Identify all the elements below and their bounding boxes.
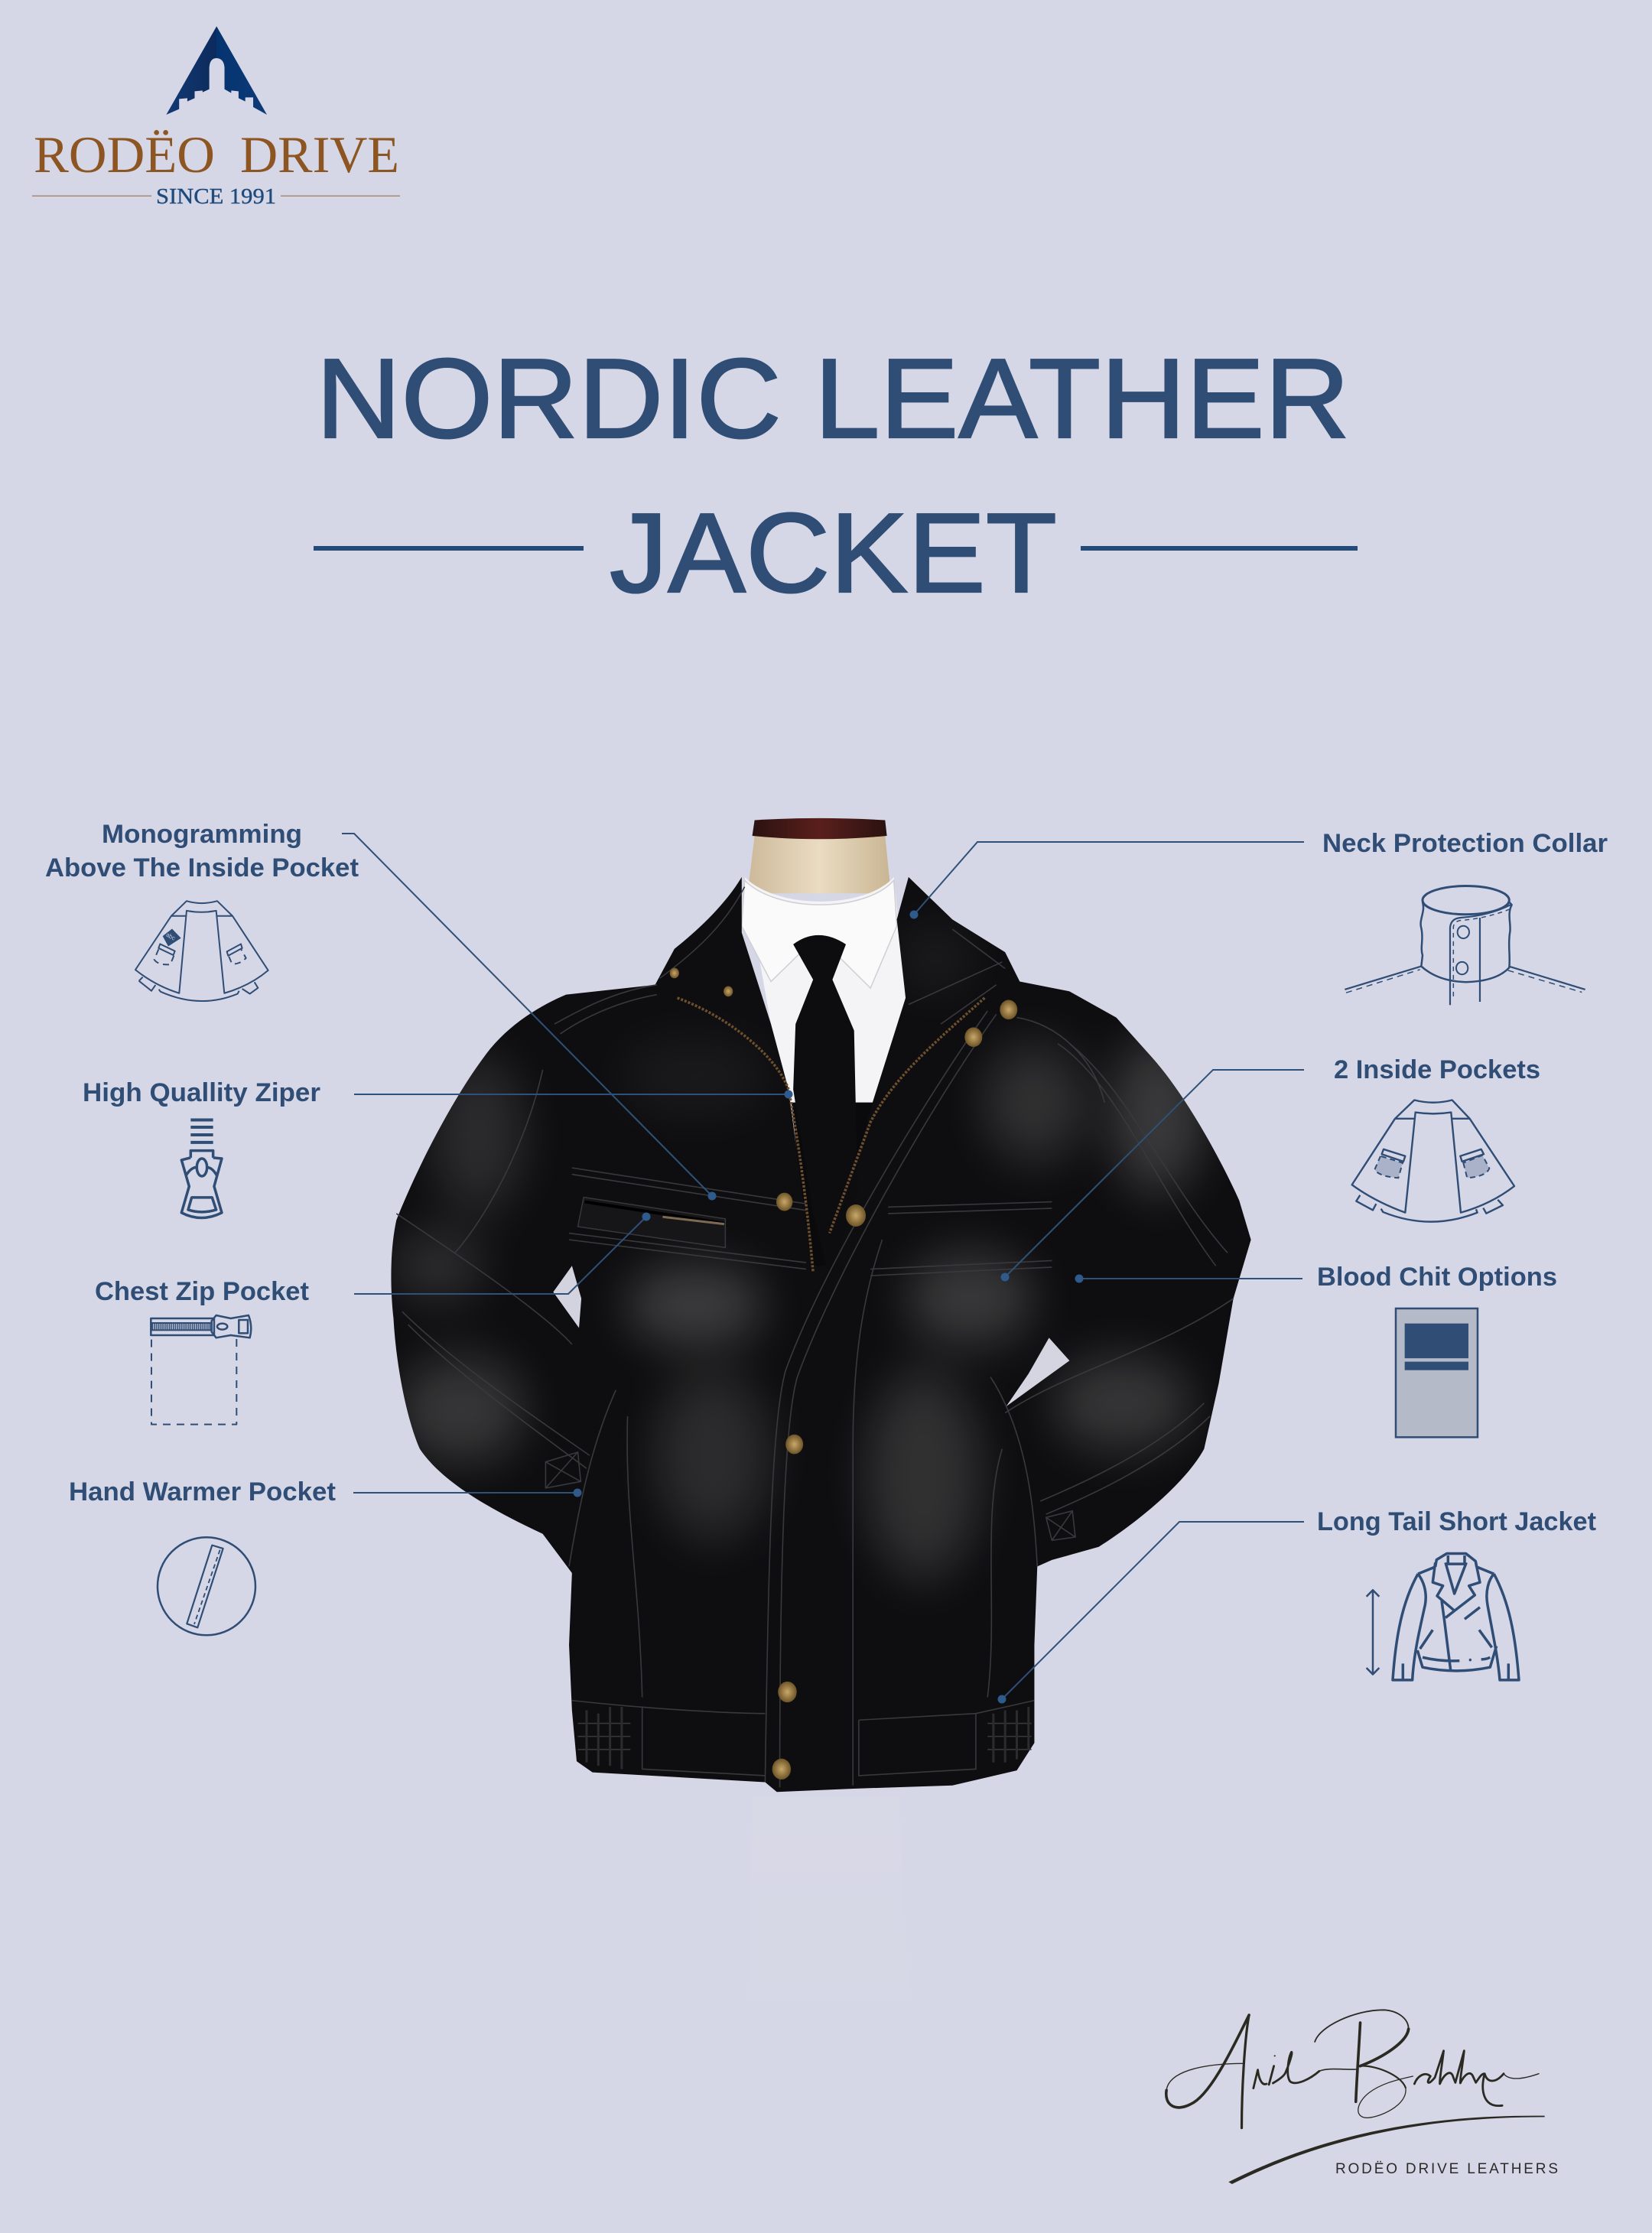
brand name xyxy=(34,125,399,184)
chest pocket zipper xyxy=(578,1198,725,1247)
label: blood chit options: Blood Chit Options xyxy=(1317,1263,1557,1292)
leader: long tail xyxy=(997,1522,1304,1704)
tie xyxy=(793,935,857,1279)
right gap xyxy=(1006,1338,1069,1406)
icon: collar xyxy=(1345,886,1585,1005)
icon: short jacket with length arrow xyxy=(1367,1553,1519,1680)
seams and stitching xyxy=(396,887,1234,1787)
jacket body xyxy=(391,877,1251,1792)
label: monogramming xyxy=(45,820,359,882)
icon: jacket interior with monogram: abc xyxy=(165,931,176,942)
icon: zipper pull xyxy=(181,1120,222,1217)
label: 2 inside pockets: 2 Inside Pockets xyxy=(1334,1055,1540,1084)
waistband ribbing xyxy=(587,1707,1029,1769)
logo: Rodeo Drive xyxy=(32,26,400,209)
leader: zipper xyxy=(354,1090,792,1098)
leader: inside pockets xyxy=(1000,1070,1304,1282)
brand name: RODËO xyxy=(34,125,215,184)
jacket outline xyxy=(1393,1553,1519,1680)
since line: SINCE 1991 xyxy=(156,184,276,209)
title xyxy=(314,336,1358,616)
icon: zip pocket xyxy=(151,1315,251,1425)
shirt xyxy=(745,877,906,1116)
arrow xyxy=(1367,1590,1379,1674)
icon: hand warmer pocket xyxy=(158,1537,255,1635)
icon: blood chit panel xyxy=(1396,1308,1478,1437)
leader: monogramming xyxy=(342,834,716,1201)
brass buttons xyxy=(670,968,1017,1780)
jacket on mannequin xyxy=(391,818,1251,1792)
shirt collar shadow xyxy=(742,880,897,988)
light gaps between arms and body xyxy=(553,1266,581,1328)
icon: jacket interior with monogram xyxy=(135,901,268,1001)
mannequin neck xyxy=(747,836,891,893)
leader: neck collar xyxy=(910,842,1304,919)
label: zipper: High Quallity Ziper xyxy=(83,1078,320,1107)
leader: hand warmer xyxy=(353,1488,581,1497)
leader lines xyxy=(342,834,1304,1704)
icon: tower arrow xyxy=(166,26,267,115)
mannequin cap xyxy=(753,818,887,839)
signature brand: RODËO DRIVE LEATHERS xyxy=(1335,2161,1558,2177)
label: monogramming: Above The Inside Pocket xyxy=(45,853,359,882)
label: long tail short jacket: Long Tail Short Jacket xyxy=(1317,1507,1596,1536)
label: monogramming: Monogramming xyxy=(102,820,302,849)
icon: jacket interior with two pockets xyxy=(1352,1100,1514,1222)
faint mannequin reflection xyxy=(746,1797,910,2034)
leather highlights xyxy=(391,926,1204,1580)
inner shadow below shirt xyxy=(792,1103,876,1273)
title: JACKET xyxy=(610,490,1057,616)
leader: blood chit xyxy=(1075,1274,1302,1283)
label: chest zip pocket: Chest Zip Pocket xyxy=(95,1277,309,1306)
brand name: DRIVE xyxy=(240,125,399,184)
leader: chest pocket xyxy=(354,1213,650,1294)
main zippers xyxy=(678,998,984,1273)
signature stroke xyxy=(1166,2010,1545,2184)
signature xyxy=(1166,2010,1558,2184)
label: neck protection collar: Neck Protection Collar xyxy=(1322,829,1608,858)
title: NORDIC LEATHER xyxy=(316,336,1350,462)
label: hand warmer pocket: Hand Warmer Pocket xyxy=(69,1477,336,1507)
